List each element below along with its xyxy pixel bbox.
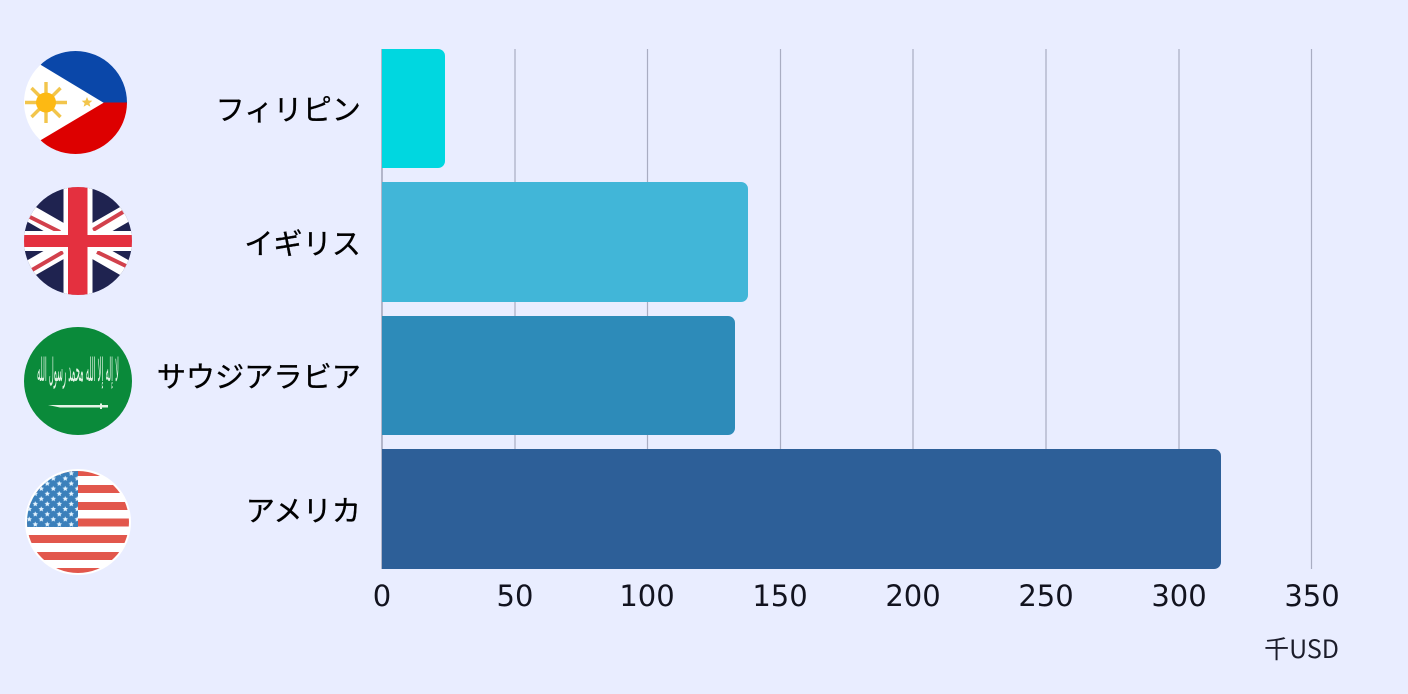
x axis tick labels: 0 xyxy=(373,579,391,613)
bar chart xyxy=(382,49,1312,569)
x axis tick labels: 300 xyxy=(1151,579,1207,613)
x axis tick labels: 50 xyxy=(497,579,533,613)
icon: Saudi Arabia flag xyxy=(24,327,132,435)
icon: United States flag xyxy=(25,469,131,575)
bar: フィリピン xyxy=(382,49,445,168)
category labels xyxy=(157,95,361,528)
label: アメリカ: アメリカ xyxy=(246,496,361,528)
x axis tick labels: 250 xyxy=(1018,579,1074,613)
bar: イギリス xyxy=(382,182,748,302)
x axis tick labels xyxy=(373,579,1340,613)
bar: アメリカ xyxy=(382,449,1221,569)
x axis tick labels: 200 xyxy=(885,579,941,613)
infographic canvas: لا إله إلا الله محمد رسول الله xyxy=(37,351,119,389)
x axis tick labels: 100 xyxy=(619,579,675,613)
axis unit: 千USD xyxy=(1264,630,1339,666)
label: フィリピン: フィリピン xyxy=(216,95,361,127)
label: イギリス: イギリス xyxy=(244,229,361,261)
bar: サウジアラビア xyxy=(382,316,735,435)
icon: United Kingdom flag xyxy=(24,187,132,295)
label: サウジアラビア: サウジアラビア xyxy=(157,362,361,394)
x axis tick labels: 150 xyxy=(752,579,808,613)
x axis tick labels: 350 xyxy=(1284,579,1340,613)
icon: Philippines flag xyxy=(24,51,128,155)
